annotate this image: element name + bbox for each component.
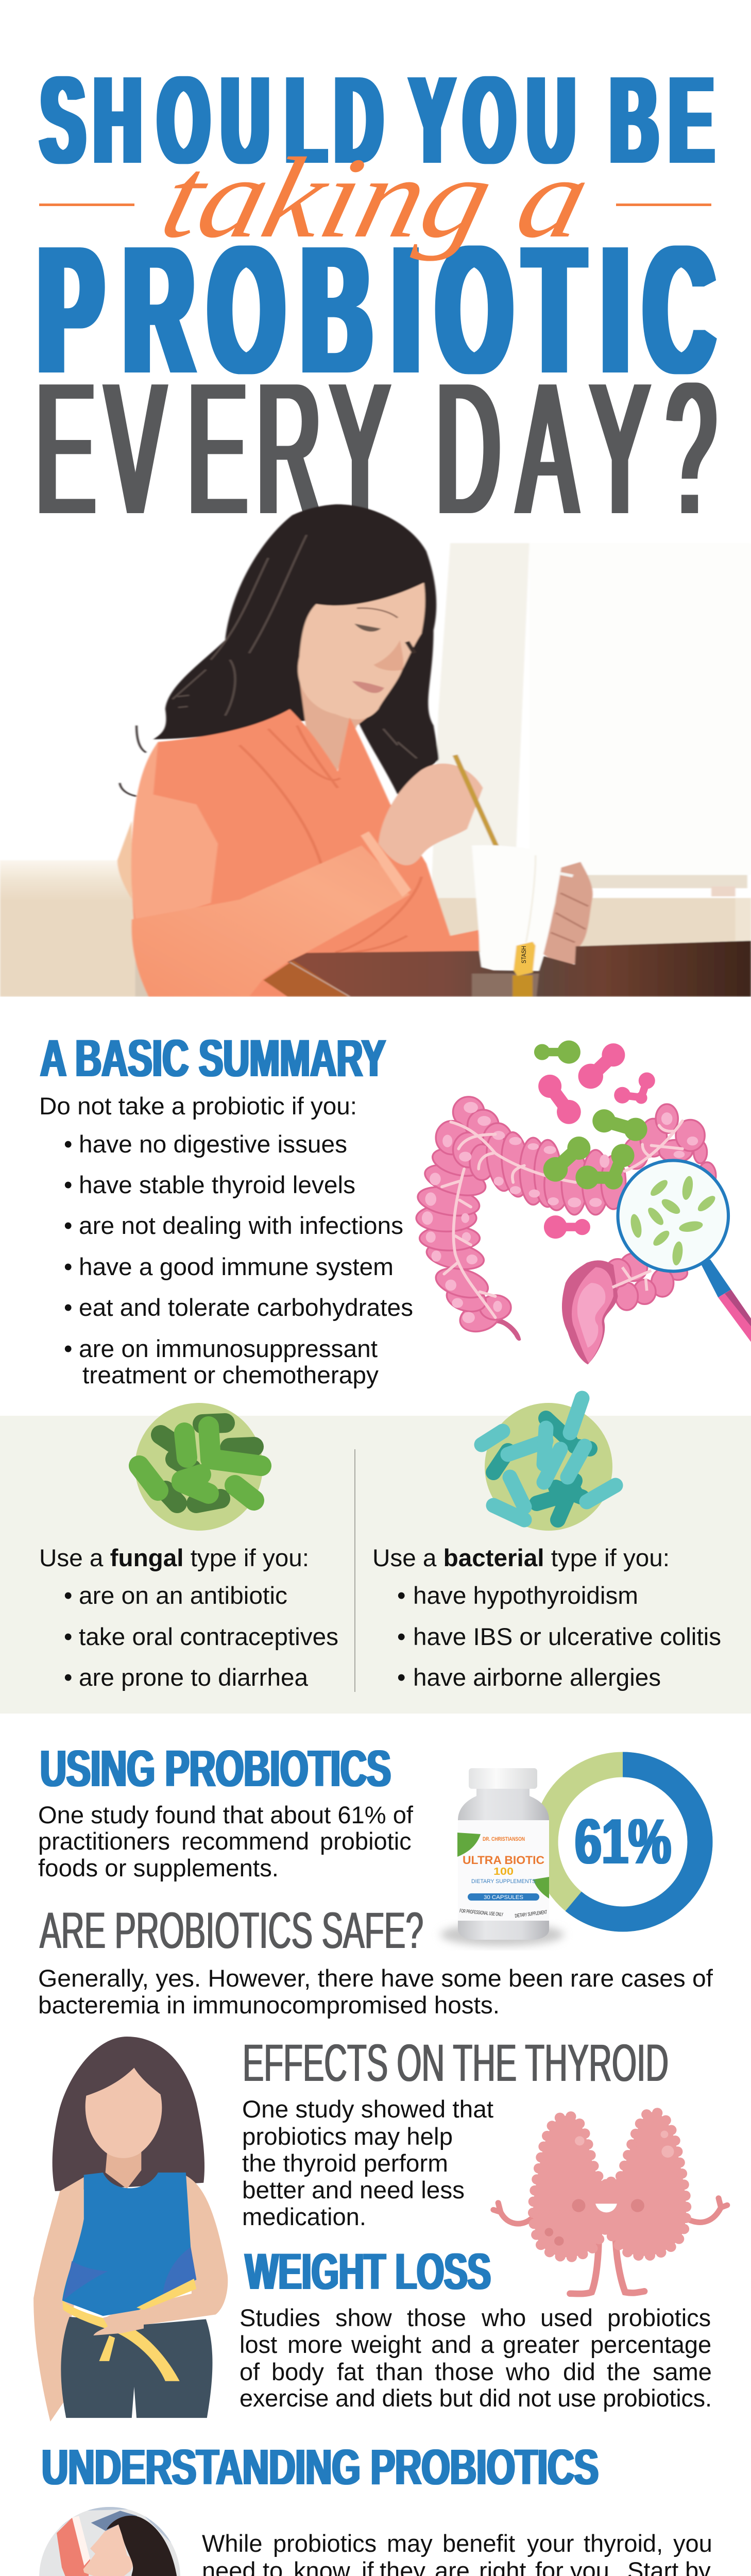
raised arm — [57, 2518, 90, 2576]
column: bacterial type: Use a bacterial type if you: — [372, 1544, 670, 1571]
text: studies: and — [431, 2331, 471, 2358]
bullet list: have a good immune system — [79, 1253, 394, 1280]
text: studies: probiotics — [607, 2304, 711, 2331]
sweater back — [117, 821, 132, 900]
hand holding spoon — [379, 764, 483, 865]
bullet list: • — [64, 1294, 72, 1321]
column: fungal type: • — [64, 1664, 72, 1691]
column: fungal type: are on an antibiotic — [79, 1582, 287, 1609]
section: understanding probiotics — [38, 2439, 713, 2576]
bullet list: • — [64, 1130, 72, 1158]
section: using probiotics — [38, 1740, 414, 1882]
text: answer: Generally, yes. However, there have some been rare cases of — [38, 1964, 713, 1992]
title rule right — [616, 204, 711, 206]
label: capsules: 30 CAPSULES — [484, 1894, 523, 1901]
face — [83, 2523, 135, 2576]
text: studies: Studies — [240, 2304, 320, 2331]
text: call to action — [202, 2530, 713, 2576]
face — [298, 583, 425, 719]
finger creases — [551, 893, 588, 942]
right arm — [103, 2175, 228, 2326]
stray hair strands — [120, 725, 146, 796]
thyroid face — [544, 2131, 674, 2246]
label: brand: DR. CHRISTIANSON — [483, 1836, 525, 1842]
measuring tape — [62, 2279, 196, 2381]
colon: rectum — [562, 1260, 618, 1364]
bullet list: eat and tolerate carbohydrates — [79, 1294, 413, 1321]
title line: probiotic: PROBIOTIC — [38, 208, 714, 411]
title line: should you be: SHOULD YOU BE — [41, 50, 713, 189]
text: study: medication. — [242, 2203, 366, 2230]
spoon — [455, 755, 498, 851]
facial features — [352, 608, 414, 693]
text: studies — [240, 2304, 712, 2412]
hair — [107, 2516, 179, 2576]
heading: USING PROBIOTICS — [40, 1740, 391, 1798]
label: dietary supplement: DIETARY SUPPLEMENT — [515, 1909, 548, 1919]
colon: sigmoid bands — [612, 1267, 651, 1291]
left arm — [33, 2177, 84, 2421]
text: call to action: you — [673, 2530, 712, 2557]
sweater shoulder highlight — [131, 742, 218, 926]
icon: fungal culture — [135, 1403, 263, 1531]
column: bacterial type: • — [397, 1623, 405, 1650]
text: studies: show — [335, 2304, 392, 2331]
colon: pale bands — [442, 1121, 682, 1317]
neck — [106, 2145, 141, 2189]
text: studies: than — [376, 2358, 423, 2385]
photo background: wall, window and sofa — [0, 543, 751, 996]
leaf left — [457, 1833, 481, 1857]
text: studies: the — [607, 2358, 640, 2385]
text: studies: greater — [503, 2331, 579, 2358]
heading: A BASIC SUMMARY — [40, 1029, 386, 1088]
magnifier handle grip — [718, 1290, 751, 1342]
section: effects on the thyroid — [242, 2033, 669, 2230]
divider — [354, 1449, 355, 1692]
colon: highlights — [422, 1102, 698, 1323]
neck — [298, 683, 368, 771]
text: studies: did — [563, 2358, 595, 2385]
text: call to action: your — [527, 2530, 574, 2557]
tea tag reflection — [513, 975, 533, 996]
tea tag text: STASH — [520, 946, 527, 963]
bacterium: pink — [578, 1043, 625, 1089]
column: fungal type: are prone to diarrhea — [79, 1664, 309, 1691]
column: bacterial type: • — [397, 1664, 405, 1691]
text: study: probiotic — [320, 1827, 412, 1855]
column: bacterial type: have airborne allergies — [413, 1664, 661, 1691]
column: bacterial type: • — [397, 1582, 405, 1609]
sweater folds — [240, 725, 421, 954]
column: fungal type — [39, 1544, 338, 1691]
hair highlights — [173, 535, 417, 758]
column: fungal type: • — [64, 1582, 72, 1609]
thyroid legs — [570, 2233, 644, 2294]
thyroid arms — [493, 2198, 727, 2224]
text: studies: who — [505, 2358, 550, 2385]
text: call to action: may — [387, 2530, 433, 2557]
hair — [53, 2037, 204, 2191]
bullet list: • — [64, 1212, 72, 1239]
product bottle — [440, 1768, 564, 1946]
text: studies: weight — [351, 2331, 421, 2358]
mug handle — [559, 873, 573, 876]
text: study: better and need less — [242, 2176, 465, 2204]
donut remainder — [545, 1765, 700, 1919]
hand — [93, 2311, 144, 2335]
neck — [103, 2576, 135, 2577]
bullet list: are not dealing with infections — [79, 1212, 403, 1239]
text: studies: fat — [337, 2358, 364, 2385]
text: studies: a — [481, 2331, 494, 2358]
label: product: ULTRA BIOTIC — [463, 1854, 544, 1867]
illustration: thyroid character — [493, 2112, 727, 2294]
text: study: the thyroid perform — [242, 2149, 448, 2177]
text: studies: who — [481, 2304, 526, 2331]
bullet list: have no digestive issues — [79, 1130, 347, 1158]
bullet list — [64, 1130, 413, 1388]
title line: every day: EVERY DAY? — [37, 344, 715, 553]
column: bacterial type: have hypothyroidism — [413, 1582, 638, 1609]
panel: fungal and bacterial types — [0, 1398, 751, 1714]
donut chart: 61 percent — [545, 1765, 700, 1919]
icon: bacterial culture — [482, 1398, 616, 1531]
bottle shadow — [440, 1923, 564, 1946]
text: studies: of — [240, 2358, 260, 2385]
bacterium: pink — [538, 1075, 581, 1124]
text: studies: same — [653, 2358, 712, 2385]
tea tag string — [526, 855, 536, 942]
text: answer: bacteremia in immunocompromised hosts. — [38, 1991, 500, 2019]
pants — [61, 2317, 212, 2418]
circular photo: woman looking up — [38, 2505, 182, 2576]
bullet list: have stable thyroid levels — [79, 1171, 355, 1198]
colon: tail — [475, 1317, 521, 1341]
sweater body — [131, 709, 479, 996]
label: capsule pill — [468, 1893, 539, 1901]
bullet list: • — [64, 1335, 72, 1362]
bottle body — [458, 1789, 549, 1940]
title rule left — [39, 204, 134, 206]
bullet list: treatment or chemotherapy — [82, 1361, 379, 1388]
chair arm highlight — [290, 962, 350, 996]
donut label: 61% — [575, 1806, 671, 1877]
column: fungal type: take oral contraceptives — [79, 1623, 338, 1650]
text: studies: more — [287, 2331, 343, 2358]
photo: woman stirring a mug of tea — [0, 504, 751, 996]
column: fungal type: • — [64, 1623, 72, 1650]
text: study — [242, 2095, 493, 2230]
microbes in lens — [629, 1175, 718, 1266]
bacterium: green — [534, 1041, 581, 1064]
magnifier handle — [701, 1260, 731, 1297]
text: study: practitioners — [38, 1827, 170, 1855]
mug — [472, 845, 563, 970]
title line: taking a: taking a — [150, 134, 602, 262]
table — [287, 941, 751, 996]
text: studies: those — [435, 2358, 494, 2385]
bottle label — [458, 1820, 549, 1921]
bacterium: green — [592, 1109, 647, 1141]
wooden chair arm — [264, 960, 350, 996]
heading: ARE PROBIOTICS SAFE? — [40, 1902, 423, 1959]
bacterium: pink — [544, 1215, 590, 1239]
text: study: probiotics may help — [242, 2123, 453, 2150]
leaf right — [533, 1877, 549, 1899]
text: studies: percentage — [590, 2331, 711, 2358]
sleeve highlight — [72, 2516, 90, 2566]
mug reflection — [472, 974, 539, 996]
text: study: One study showed that — [242, 2095, 493, 2123]
text: study: foods or supplements. — [38, 1854, 279, 1882]
face — [86, 2068, 162, 2158]
bacterium: green — [575, 1144, 635, 1190]
tea tag — [514, 942, 536, 976]
hair — [153, 504, 439, 794]
tank top shading — [63, 2247, 196, 2300]
panel background — [0, 1416, 751, 1714]
magnifier lens — [618, 1160, 728, 1272]
column: bacterial type: have IBS or ulcerative colitis — [413, 1623, 721, 1650]
text: do not take: Do not take a probiotic if you: — [39, 1092, 357, 1120]
text: studies: exercise and diets but did not use probiotics. — [240, 2384, 712, 2412]
thyroid bumps — [533, 2112, 686, 2257]
column: bacterial type — [372, 1544, 721, 1691]
donut value — [545, 1765, 700, 1919]
text: answer — [38, 1964, 713, 2019]
section: are probiotics safe — [38, 1902, 713, 2019]
photo sky and hills — [38, 2505, 182, 2576]
label: professional use: FOR PROFESSIONAL USE ONLY — [459, 1908, 504, 1918]
text: study: One study found that about 61% of — [38, 1801, 414, 1828]
label: 100: 100 — [493, 1866, 514, 1877]
text: studies: body — [271, 2358, 324, 2385]
text: call to action: While — [202, 2530, 263, 2557]
bottle cap — [469, 1768, 537, 1789]
colon: upper lobes — [436, 1097, 716, 1215]
fingers on mug handle — [541, 862, 593, 964]
cuff — [361, 832, 411, 897]
bacterium: green — [543, 1137, 590, 1182]
label: dietary supplements: DIETARY SUPPLEMENTS — [471, 1878, 536, 1885]
bullet list: are on immunosuppressant — [79, 1335, 378, 1362]
bacterium: pink small — [614, 1073, 655, 1104]
text: call to action: thyroid, — [584, 2530, 663, 2557]
text: studies: used — [540, 2304, 593, 2331]
illustration: colon with bacteria and magnifier — [416, 1041, 751, 1364]
colon: sigmoid lobes — [605, 1253, 687, 1310]
text: study: recommend — [181, 1827, 309, 1855]
text: call to action: benefit — [442, 2530, 515, 2557]
section: weight loss — [240, 2243, 712, 2412]
title — [37, 50, 715, 553]
text: study — [38, 1801, 414, 1882]
blue tank top — [62, 2173, 196, 2316]
sleeve — [131, 845, 409, 996]
magnifier grip shade — [725, 1290, 751, 1327]
bullet list: • — [64, 1171, 72, 1198]
bullet list: • — [64, 1253, 72, 1280]
text: studies: those — [407, 2304, 466, 2331]
heading: WEIGHT LOSS — [245, 2243, 491, 2300]
text: studies: lost — [240, 2331, 277, 2358]
text: call to action: probiotics — [273, 2530, 377, 2557]
column: fungal type: Use a fungal type if you: — [39, 1544, 309, 1571]
illustration: woman measuring waist — [33, 2037, 228, 2421]
section: a basic summary — [39, 1029, 413, 1388]
colon: left limb lobes — [416, 1144, 511, 1336]
